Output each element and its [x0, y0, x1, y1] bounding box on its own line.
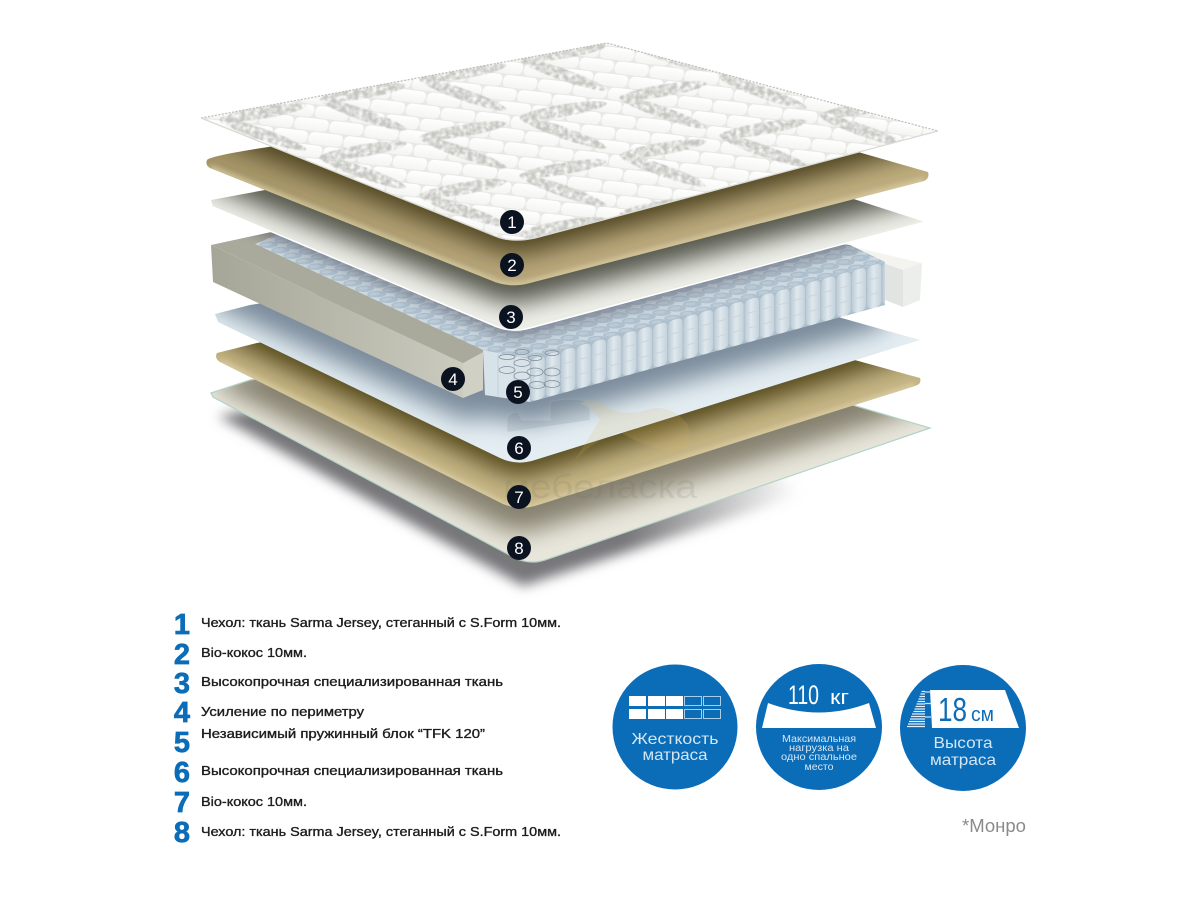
legend item 1: Чехол: ткань Sarma Jersey, стеганный с S.Form 10мм.	[201, 615, 561, 630]
badge 2: 2	[507, 256, 517, 275]
layer 5: pocket spring block	[250, 232, 885, 402]
badge 8	[507, 536, 531, 560]
height caption: Высота	[934, 735, 993, 752]
legend item 8: Чехол: ткань Sarma Jersey, стеганный с S.Form 10мм.	[201, 824, 561, 839]
load value: 110	[788, 680, 819, 710]
watermark text: мебеласка	[503, 468, 698, 505]
legend item 1	[174, 609, 561, 641]
layer 1: quilted cover	[201, 43, 938, 240]
layer 8: bottom cover	[210, 378, 932, 563]
layer 2: bio coconut	[206, 146, 928, 286]
load caption: место	[804, 761, 834, 773]
badge: mattress height	[900, 665, 1026, 791]
badge: mattress firmness: матраса	[642, 747, 708, 764]
shadow under mattress	[218, 400, 810, 586]
layer legend list	[174, 609, 561, 849]
load caption: одно спальное	[781, 751, 857, 763]
load value: кг	[830, 687, 849, 709]
badge 6: 6	[514, 439, 524, 458]
legend item 4: Усиление по периметру	[201, 704, 365, 719]
legend item 2: 2	[174, 639, 190, 671]
layer 6: high-strength fabric	[215, 294, 920, 463]
badge 6	[507, 436, 531, 460]
firmness caption: Жесткость	[632, 731, 718, 748]
badge: mattress height: матраса	[930, 752, 996, 769]
legend item 5: 5	[174, 727, 190, 759]
legend item 7: 7	[174, 787, 190, 819]
badge 4: 4	[448, 370, 458, 389]
legend item 5	[174, 726, 485, 759]
badge 5	[506, 380, 530, 404]
legend item 6	[174, 757, 503, 789]
legend item 6: Высокопрочная специализированная ткань	[201, 763, 503, 778]
legend item 3	[174, 668, 503, 700]
badge 3	[499, 305, 523, 329]
icon: sagging mattress	[762, 703, 876, 728]
badge 4	[441, 367, 465, 391]
legend item 5: Независимый пружинный блок “TFK 120”	[201, 726, 485, 741]
legend item 1: 1	[174, 609, 190, 641]
load caption	[781, 733, 857, 773]
badge 2	[500, 253, 524, 277]
layer 3: high-strength fabric	[211, 190, 924, 331]
legend item 4: 4	[174, 697, 190, 729]
mattress layers illustration	[200, 43, 940, 586]
badge 1: 1	[507, 213, 517, 232]
load caption: Максимальная	[782, 733, 856, 745]
badge 8: 8	[514, 539, 524, 558]
height value	[938, 691, 994, 728]
badge: maximum load	[756, 664, 882, 790]
badge 1	[500, 210, 524, 234]
height value: см	[971, 704, 994, 726]
legend item 7	[174, 787, 307, 819]
legend item 6: 6	[174, 757, 190, 789]
legend item 8	[174, 817, 561, 849]
watermark logo	[507, 399, 690, 462]
layer 7: bio coconut	[216, 342, 920, 508]
model name note: *Монро	[962, 816, 1026, 836]
layer 4: perimeter reinforcement	[211, 228, 922, 398]
badge 7	[507, 485, 531, 509]
legend item 2	[174, 639, 307, 671]
legend item 2: Bio-кокос 10мм.	[201, 645, 307, 660]
legend item 3: 3	[174, 668, 190, 700]
legend item 4	[174, 697, 365, 729]
badge: mattress firmness	[612, 664, 738, 790]
legend item 3: Высокопрочная специализированная ткань	[201, 674, 503, 689]
icon: height ruler and mattress	[907, 690, 1019, 728]
height value: 18	[938, 691, 967, 728]
legend item 7: Bio-кокос 10мм.	[201, 794, 307, 809]
icon: firmness scale	[629, 696, 720, 719]
badge 3: 3	[506, 308, 516, 327]
badge 5: 5	[513, 383, 523, 402]
load caption: нагрузка на	[789, 742, 849, 754]
legend item 8: 8	[174, 817, 190, 849]
badge 7: 7	[514, 488, 524, 507]
